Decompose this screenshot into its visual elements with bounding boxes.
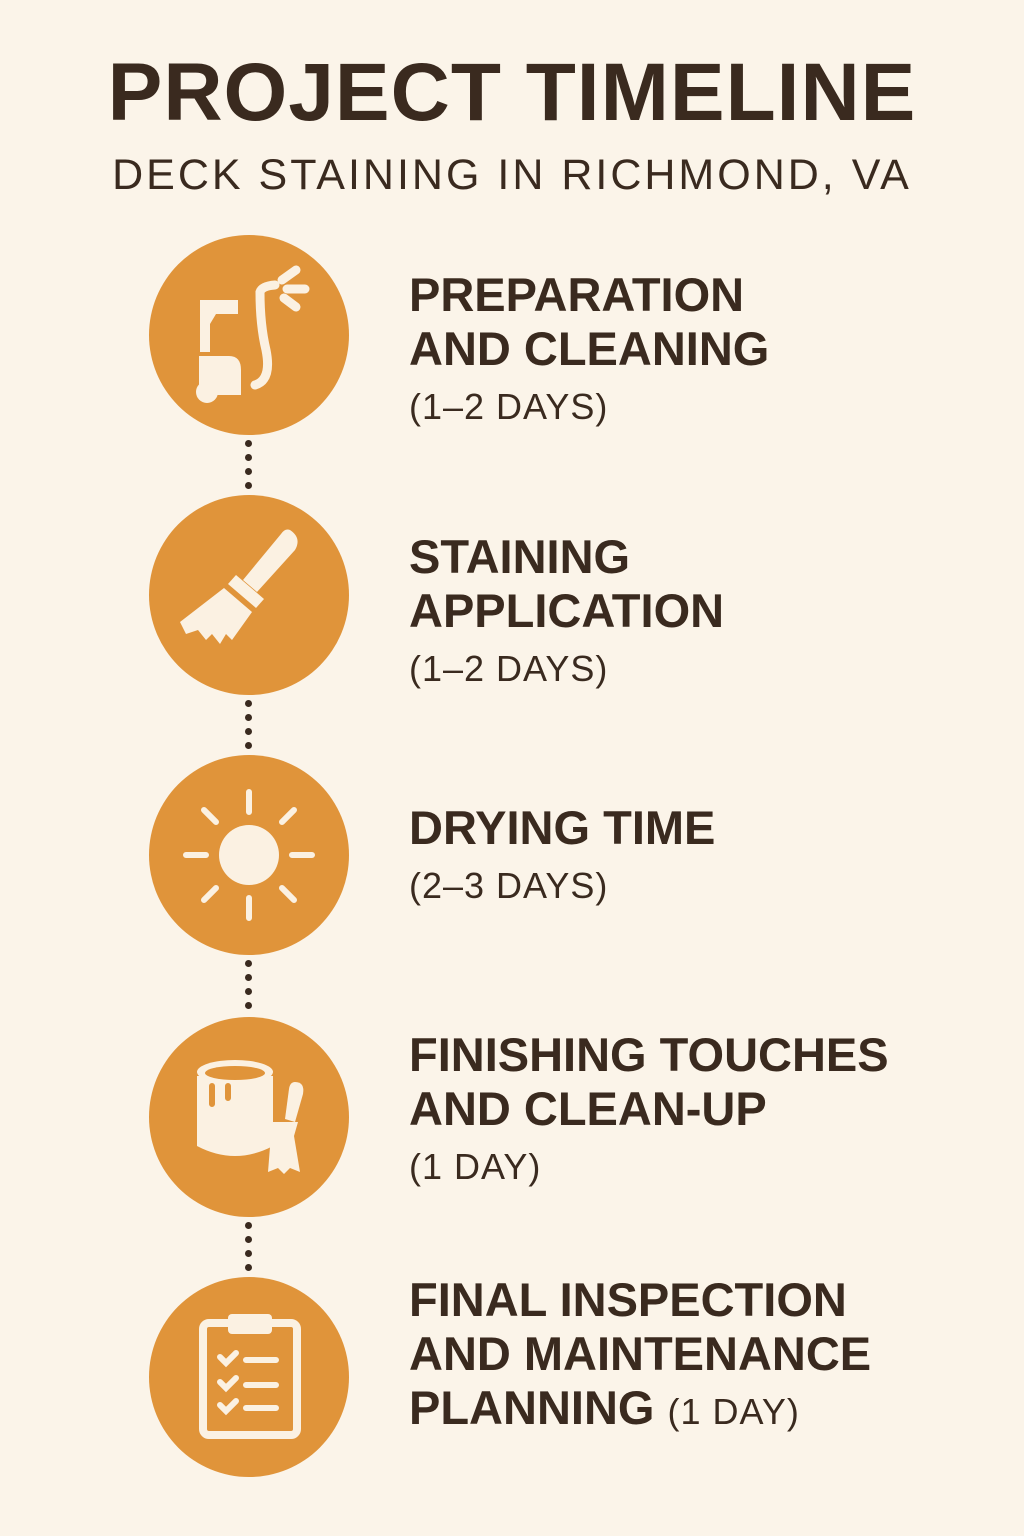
step 4 text: FINISHING TOUCHES <box>409 1028 889 1081</box>
subtitle: DECK STAINING IN RICHMOND, VA <box>112 151 912 199</box>
step 1 text: AND CLEANING <box>409 322 769 375</box>
connector dots 4-5 <box>245 1222 252 1271</box>
title: PROJECT TIMELINE <box>108 47 916 138</box>
step 1 text <box>409 268 769 427</box>
connector dots 2-3 <box>245 700 252 749</box>
step 2 text: STAINING <box>409 530 630 583</box>
icon: paint brush <box>149 495 349 695</box>
step 5 text: FINAL INSPECTION <box>409 1273 847 1326</box>
step 2 text: (1–2 DAYS) <box>409 648 608 689</box>
step 3 text: DRYING TIME <box>409 801 715 854</box>
step 4 text: (1 DAY) <box>409 1146 541 1187</box>
connector dots 1-2 <box>245 440 252 489</box>
step 1 text: (1–2 DAYS) <box>409 386 608 427</box>
connector dots 3-4 <box>245 960 252 1009</box>
step 5 text <box>409 1273 871 1434</box>
step 4 text <box>409 1028 889 1187</box>
step 2 text: APPLICATION <box>409 584 724 637</box>
icon: paint can and brush <box>149 1017 349 1217</box>
step 5 text: AND MAINTENANCE <box>409 1327 871 1380</box>
step 5 text: PLANNING (1 DAY) <box>409 1381 800 1434</box>
step 3 text <box>409 801 715 906</box>
icon: clipboard checklist <box>149 1277 349 1477</box>
step 3 text: (2–3 DAYS) <box>409 865 608 906</box>
icon: pressure washer <box>149 235 349 435</box>
step 4 text: AND CLEAN-UP <box>409 1082 767 1135</box>
icon: sun <box>149 755 349 955</box>
step 2 text <box>409 530 724 689</box>
step 1 text: PREPARATION <box>409 268 744 321</box>
